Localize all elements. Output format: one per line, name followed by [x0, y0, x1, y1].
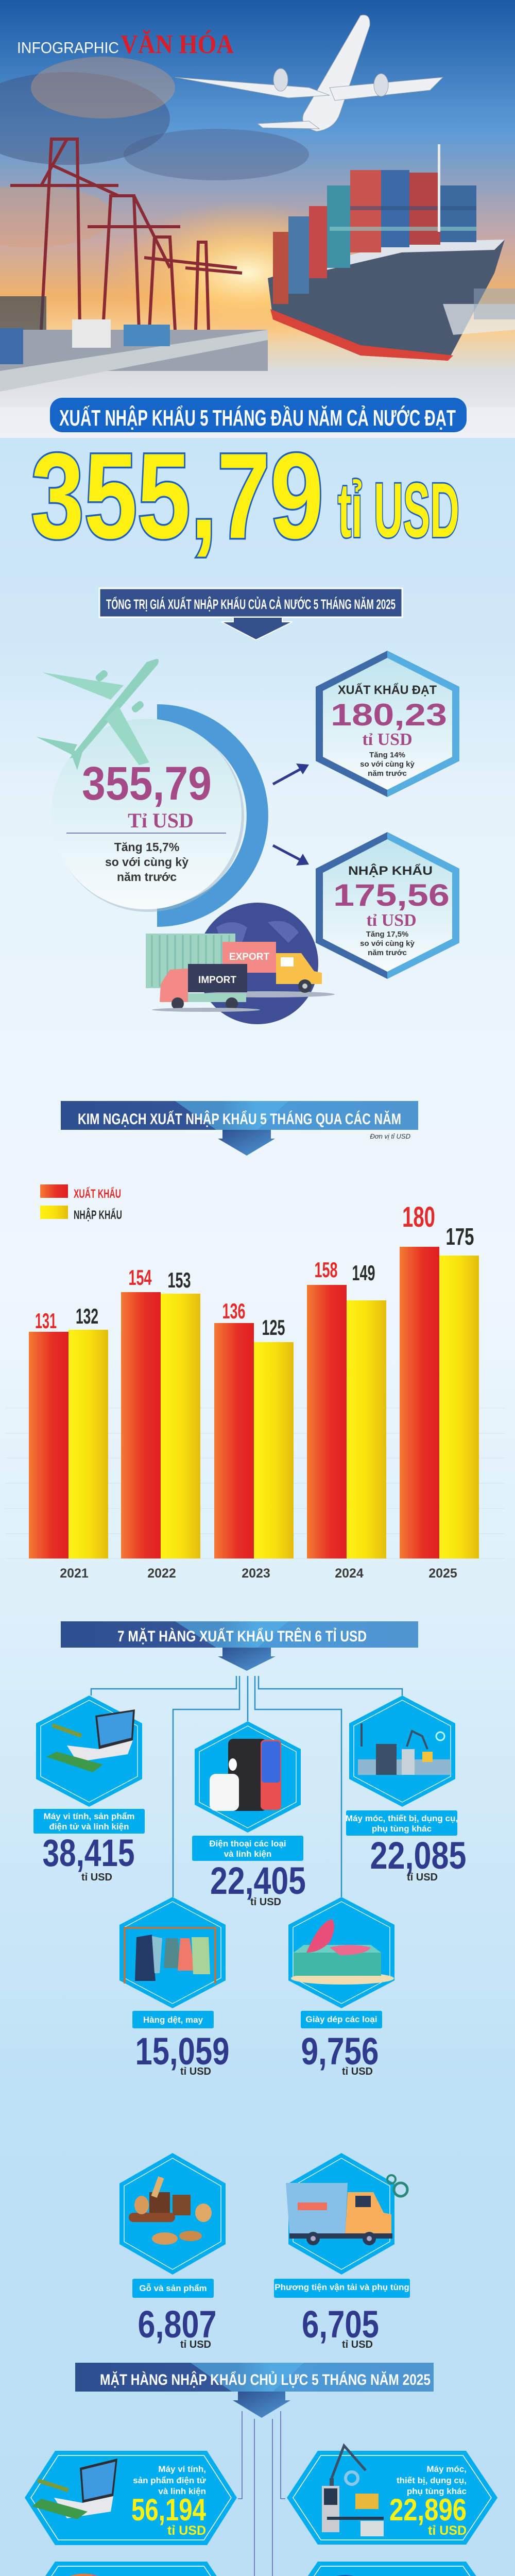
import items header [75, 2363, 434, 2418]
export items header [61, 1621, 418, 1671]
export label 1: 38,415 [42, 1832, 135, 1874]
hexagon: import: năm trước [368, 948, 407, 957]
bar chart: 149 [352, 1261, 375, 1285]
logo top [17, 29, 234, 59]
export label 1: điện tử và linh kiện [49, 1822, 129, 1832]
export label 4: 15,059 [135, 2030, 230, 2073]
export item 7: vehicles [286, 2153, 407, 2275]
bar chart: 125 [262, 1315, 285, 1340]
export item 3: machinery [349, 1696, 455, 1807]
hexagon: export: so với cùng kỳ [360, 760, 415, 769]
export label 2 [192, 1836, 306, 1908]
circle: total [51, 719, 244, 912]
export item 6: wood [119, 2153, 226, 2275]
bar chart: 2022 [147, 1566, 176, 1581]
export label 1: Máy vi tính, sản phẩm [44, 1811, 134, 1821]
illustration: globe and trucks: IMPORT [198, 975, 236, 986]
chart legend: XUẤT KHẨU [74, 1187, 121, 1201]
import box 1: computers [25, 2451, 237, 2545]
hexagon: export: tỉ USD [362, 730, 413, 749]
export label 3 [346, 1810, 467, 1883]
bar chart: 2023 [242, 1566, 270, 1581]
export item 4: textiles [119, 1897, 226, 2008]
export items header: 7 MẶT HÀNG XUẤT KHẨU TRÊN 6 TỈ USD [117, 1628, 367, 1645]
import box 1: computers: 56,194 [131, 2493, 206, 2527]
hexagon: import: Tăng 17,5% [366, 930, 408, 939]
import box 1: computers: và linh kiện [158, 2486, 206, 2496]
chart legend [40, 1184, 122, 1222]
export item 2: phones [195, 1721, 301, 1833]
import box 2: machinery: phụ tùng khác [407, 2486, 467, 2496]
bar chart: 158 [314, 1258, 338, 1282]
hexagon: import: tỉ USD [366, 911, 417, 930]
export label 2: và linh kiện [224, 1849, 271, 1859]
import box 2: machinery [287, 2446, 497, 2545]
export label 5: tỉ USD [342, 2066, 373, 2077]
export label 6: tỉ USD [180, 2339, 211, 2350]
export label 6: 6,807 [138, 2303, 216, 2346]
import box 1: computers: sản phẩm điện tử [133, 2476, 207, 2485]
export label 7 [274, 2279, 410, 2350]
bar chart [5, 1200, 505, 1581]
export label 7: Phương tiện vận tải và phụ tùng [274, 2282, 409, 2292]
export label 1: tỉ USD [81, 1872, 112, 1883]
bar chart: 132 [76, 1304, 98, 1328]
export label 4: Hàng dệt, may [143, 2015, 203, 2025]
export label 7: 6,705 [302, 2303, 379, 2346]
arrows to hexagons [273, 764, 309, 866]
export label 3: Máy móc, thiết bị, dụng cụ, [346, 1814, 458, 1823]
import box 4: plastics [287, 2562, 497, 2576]
bar chart: 131 [35, 1309, 57, 1333]
import box 1: computers: Máy vi tính, [158, 2464, 206, 2474]
circle: total: 355,79 [82, 757, 212, 810]
hexagon: import: 175,56 [333, 878, 450, 912]
export label 2: 22,405 [210, 1859, 306, 1902]
illustration: globe and trucks [146, 903, 335, 1024]
hexagon: export: năm trước [368, 769, 407, 778]
hexagon: export: XUẤT KHẨU ĐẠT [338, 683, 437, 697]
import box 2: machinery: thiết bị, dụng cụ, [397, 2476, 467, 2485]
bar chart: 2021 [60, 1566, 89, 1581]
export item 5: footwear [288, 1897, 394, 2008]
bar chart: 2024 [335, 1566, 364, 1581]
circle: total: so với cùng kỳ [105, 855, 188, 869]
import box 2: machinery: tỉ USD [428, 2523, 467, 2538]
circle: total: năm trước [117, 870, 177, 884]
circle: total: Tỉ USD [128, 809, 194, 832]
blue ring arc [157, 715, 258, 916]
chart header [61, 1101, 418, 1156]
export label 4: tỉ USD [180, 2066, 211, 2077]
export label 3: tỉ USD [407, 1872, 438, 1883]
hexagon: import: so với cùng kỳ [360, 939, 415, 948]
import connectors [238, 2411, 285, 2576]
icon: plane [36, 659, 159, 770]
chart header: Đơn vị tỉ USD [370, 1132, 410, 1140]
import items header: MẶT HÀNG NHẬP KHẨU CHỦ LỰC 5 THÁNG NĂM 2025 [100, 2371, 431, 2388]
export label 5 [301, 2011, 382, 2077]
export label 6: Gỗ và sản phẩm [139, 2283, 207, 2293]
import box 2: machinery: 22,896 [389, 2493, 467, 2527]
illustration: globe and trucks: EXPORT [229, 952, 269, 962]
bar chart: 175 [446, 1223, 474, 1250]
bar chart: 2025 [428, 1566, 457, 1581]
big total number: 355,79 [31, 428, 323, 564]
export label 1 [33, 1809, 145, 1883]
logo top: VĂN HÓA [121, 29, 234, 59]
hexagon: import [316, 832, 459, 979]
import box 1: computers: tỉ USD [167, 2523, 206, 2538]
export label 6 [132, 2279, 216, 2350]
export label 2: Điện thoại các loại [209, 1839, 286, 1849]
hexagon: import: NHẬP KHẨU [348, 863, 433, 878]
bar chart: 180 [402, 1200, 435, 1233]
export label 5: Giày dép các loại [306, 2014, 377, 2024]
chart legend: NHẬP KHẨU [74, 1208, 122, 1222]
header photo: port with plane and ship [0, 0, 515, 438]
import box 3: fabric [25, 2562, 237, 2576]
bar chart: 154 [129, 1265, 152, 1290]
export label 7: tỉ USD [342, 2339, 373, 2350]
export label 4 [132, 2011, 230, 2077]
hexagon: export: 180,23 [331, 698, 447, 732]
import box 2: machinery: Máy móc, [427, 2464, 467, 2474]
title bar [50, 398, 467, 432]
bar chart: 153 [168, 1268, 191, 1292]
export label 2: tỉ USD [250, 1896, 281, 1908]
chart header: KIM NGẠCH XUẤT NHẬP KHẨU 5 THÁNG QUA CÁC NĂM [78, 1110, 401, 1128]
bar chart: 136 [222, 1299, 245, 1323]
connector lines [91, 1676, 402, 1897]
export label 3: 22,085 [370, 1834, 467, 1877]
circle: total: Tăng 15,7% [114, 840, 179, 854]
section header: total value [99, 588, 402, 640]
export label 3: phụ tùng khác [372, 1824, 432, 1834]
hexagon: export [316, 651, 459, 797]
logo top: INFOGRAPHIC [17, 39, 119, 57]
hexagon: export: Tăng 14% [369, 751, 405, 759]
export item 1: computers [36, 1696, 142, 1807]
export label 5: 9,756 [301, 2030, 379, 2073]
